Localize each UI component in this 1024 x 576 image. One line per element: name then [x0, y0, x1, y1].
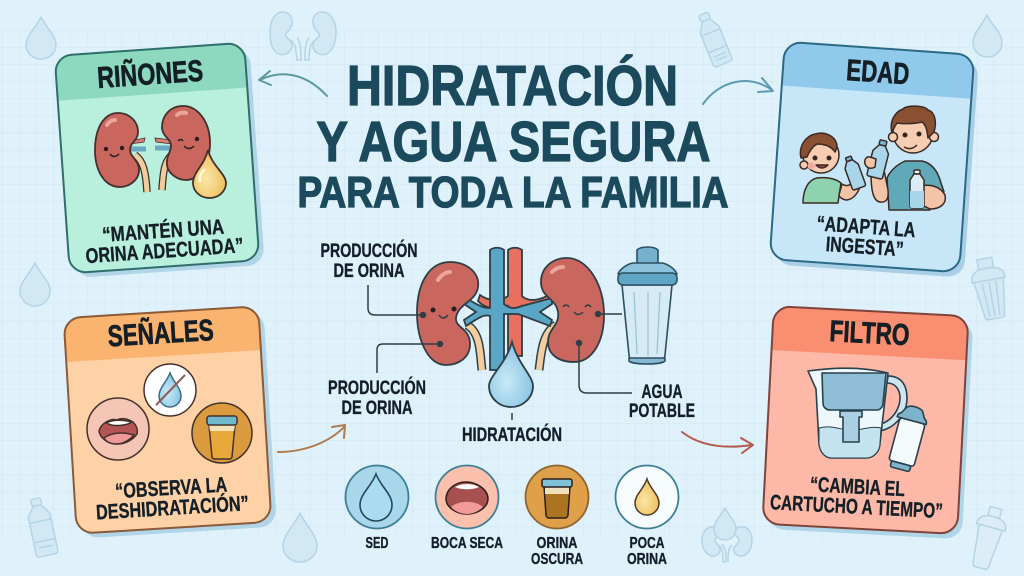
title: Y AGUA SEGURA: [316, 110, 710, 174]
heading: edad: EDAD: [845, 54, 910, 91]
quote: señales: “OBSERVA LA: [115, 473, 228, 503]
symptom: boca seca: BOCA SECA: [431, 535, 503, 552]
arrow: diagram to filtro: [682, 432, 753, 453]
quote: filtro: [769, 471, 944, 523]
diagram: kidneys and vessels: [417, 248, 604, 407]
label: producción de orina top: PRODUCCIÓN: [320, 240, 418, 262]
symptom: sed: SED: [366, 535, 388, 552]
quote: señales: DESHIDRATACIÓN”: [95, 491, 249, 524]
arrow: señales to diagram: [278, 425, 345, 452]
quote: filtro: CARTUCHO A TIEMPO”: [769, 491, 943, 523]
red vessel: [478, 248, 551, 356]
icon: dry mouth: [87, 398, 149, 460]
ureters: [467, 325, 556, 370]
panel: edad: [769, 42, 979, 278]
arrow: title to riñones: [259, 71, 327, 96]
heading: riñones: RIÑONES: [96, 54, 204, 95]
panel: señales: [64, 306, 277, 539]
label: agua potable: [629, 382, 695, 422]
left kidney: [417, 262, 478, 365]
label: hidratación: HIDRATACIÓN: [462, 424, 562, 446]
symptom: sed: [346, 466, 408, 552]
quote: riñones: “MANTÉN UNA: [101, 216, 225, 247]
symptom: orina oscura: [526, 466, 588, 568]
panel: riñones: [55, 42, 265, 278]
symptom: orina oscura: ORINA: [536, 535, 578, 552]
quote: riñones: ORINA ADECUADA”: [85, 234, 244, 268]
label: producción de orina top: DE ORINA: [334, 261, 405, 282]
title: [298, 54, 728, 217]
symptom: orina oscura: OSCURA: [531, 551, 583, 568]
symptom: poca orina: ORINA: [627, 551, 667, 568]
symptom: poca orina: [616, 466, 678, 568]
heading: señales: SEÑALES: [107, 313, 215, 353]
label: producción de orina bottom: DE ORINA: [342, 398, 413, 419]
heading: filtro: FILTRO: [829, 315, 910, 352]
symptom: boca seca: [431, 466, 503, 552]
water drop: [489, 342, 533, 407]
icon: no water: [144, 364, 196, 416]
quote: riñones: [84, 214, 244, 268]
title: PARA TODA LA FAMILIA: [298, 168, 728, 217]
right kidney: [541, 258, 604, 362]
icon: urine cup: [192, 403, 252, 463]
symptom: poca orina: POCA: [630, 535, 665, 552]
panel: filtro: [762, 306, 974, 539]
label: producción de orina bottom: PRODUCCIÓN: [328, 377, 426, 399]
icon: filter pitcher and cartridge: [808, 368, 930, 473]
quote: edad: [815, 212, 916, 262]
label: agua potable: POTABLE: [629, 401, 695, 422]
label: producción de orina bottom: [328, 377, 426, 419]
quote: edad: “ADAPTA LA: [816, 212, 916, 242]
quote: filtro: “CAMBIA EL: [809, 473, 906, 501]
quote: señales: [94, 472, 249, 524]
quote: edad: INGESTA”: [825, 233, 904, 261]
icon: child and father with bottles: [800, 106, 945, 210]
title: HIDRATACIÓN: [347, 54, 678, 118]
label: producción de orina top: [320, 240, 418, 282]
label: agua potable: AGUA: [642, 382, 683, 403]
blue vessel: [464, 248, 552, 370]
arrow: title to edad: [703, 78, 773, 104]
icon: smiling kidneys with yellow drop: [95, 106, 226, 198]
callout lines: [368, 285, 632, 420]
icon: shaker bottle: [618, 247, 677, 364]
